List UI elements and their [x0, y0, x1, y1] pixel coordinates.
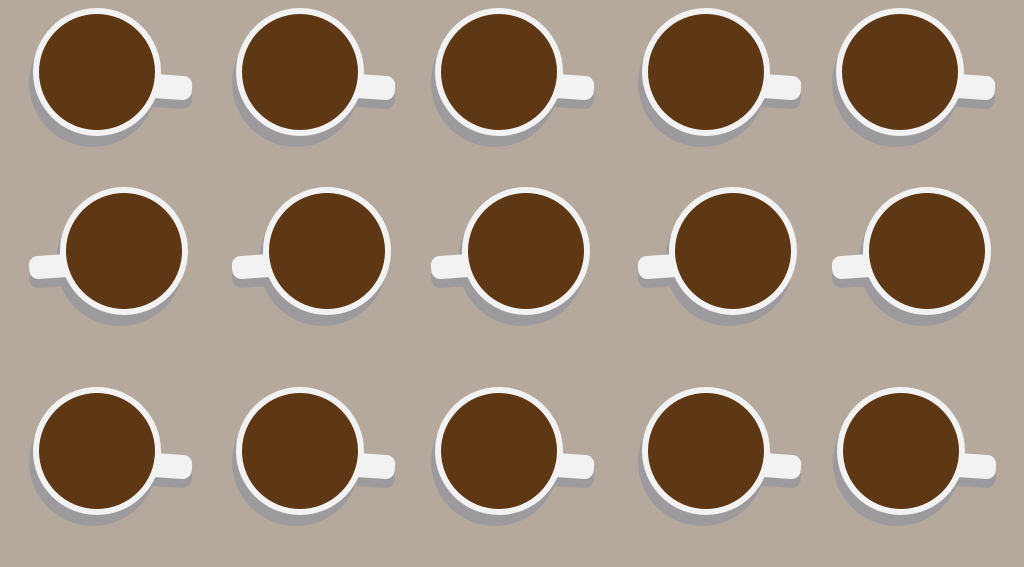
row 2 cups	[28, 187, 991, 326]
row 1 cups	[29, 8, 996, 147]
row 3 cups	[29, 387, 997, 526]
